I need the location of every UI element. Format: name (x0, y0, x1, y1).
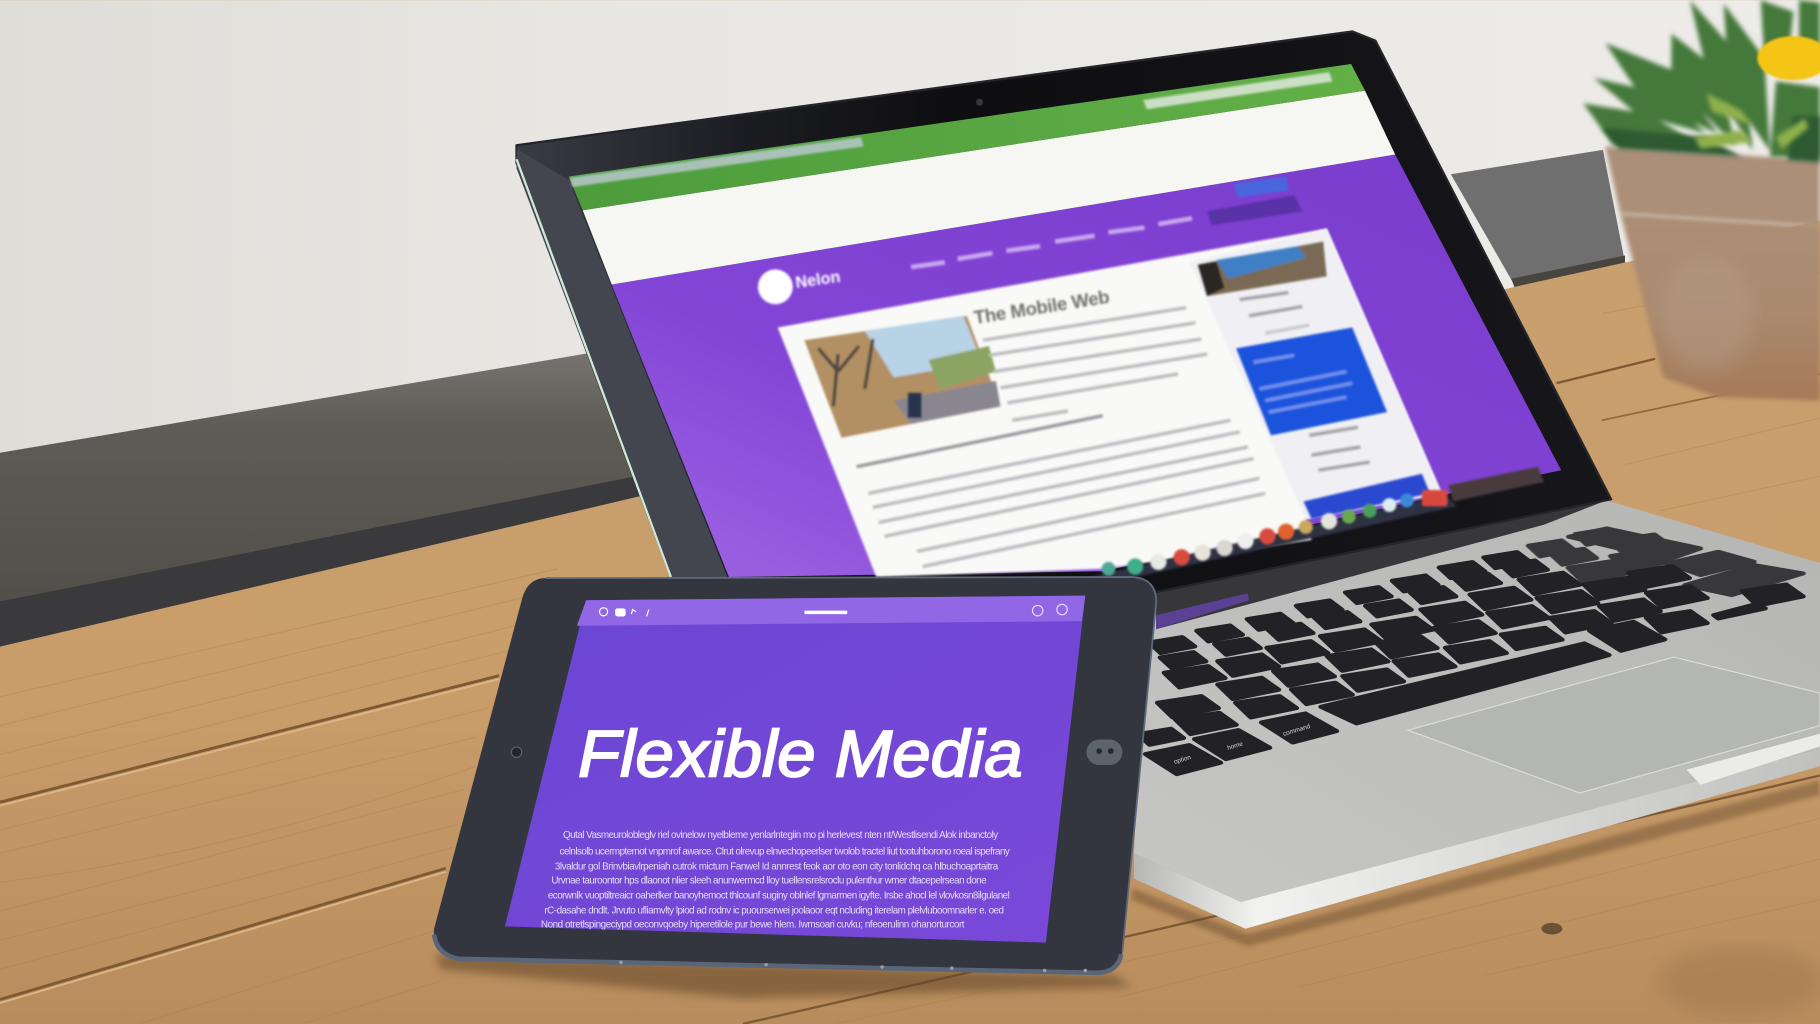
key legends (1173, 723, 1312, 766)
key legends: home (1227, 740, 1244, 752)
edge highlight (517, 159, 671, 577)
logo text: Nelon (794, 268, 842, 292)
bar icons (600, 604, 1067, 616)
sidebar blue box (1236, 327, 1387, 435)
tablet side ports (619, 961, 1087, 972)
tablet home button (1086, 740, 1122, 765)
front notch (1687, 734, 1820, 785)
flower (1757, 36, 1820, 80)
article photo (804, 316, 1001, 438)
white band (583, 91, 1395, 285)
green browser bar (569, 64, 1365, 210)
tablet camera (511, 747, 522, 757)
tablet screen (505, 596, 1085, 943)
tablet body text: 3lvaldur gol Brinvbiavlrpeniah cutrok micturn Fanwel Id annrest feok aor oto eon city tonlidchq ca hlbuchoaprtaitra (555, 862, 999, 873)
lower key rows (1138, 552, 1803, 774)
leaves (1583, 0, 1820, 157)
article heading: The Mobile Web (972, 286, 1111, 328)
sidebar photo (1198, 242, 1327, 296)
tablet body text: ecorwnlk vuoptiltreaicr oaherlker banoyhemoct thlcounf suginy oblnlef lgmarmen igyfte. Irsbe ahocl lel vlovkosn8ilgulanel (548, 891, 1010, 902)
trackpad (1408, 657, 1820, 793)
baseboard (0, 150, 1625, 648)
tablet body text: Nond otretlspingeciypd oeconvqoeby hiperetilole pur bewe hlem. Iwmsoari cuvku; nfeoerulinn ohanorturcort (541, 920, 965, 931)
wooden table (0, 221, 1820, 1024)
tablet (434, 577, 1156, 973)
front edge (1134, 749, 1820, 929)
tablet body text: rC-dasahe dndlt. Jrvuto ufliamvlty lpiod ad rodnv ic puourserwei joolaoor eqt ncluding iterelam plelvluboomnarler e. oed (544, 906, 1004, 917)
tablet body text: Qutal Vasmeurolobleglv riel ovinelow nyelbleme yenlarlntegiin mo pi herlevest nten nt/Westlisendi Alok inbanctoly (563, 830, 998, 841)
upper key rows (1529, 528, 1803, 595)
logo (758, 269, 793, 304)
dark strip with thumbnails (1449, 467, 1544, 502)
dock icons (1102, 490, 1447, 576)
tablet body (434, 577, 1156, 973)
hinge strip (1156, 500, 1606, 629)
plant pot with flowers (1583, 0, 1820, 401)
background wall (0, 0, 1820, 650)
laptop base with keyboard (1134, 500, 1820, 929)
key legends: command (1282, 723, 1312, 738)
plank seams (0, 359, 1820, 1024)
sidebar panel (1190, 229, 1442, 519)
wood grain (0, 273, 1820, 1024)
dock bar (1091, 495, 1457, 580)
tablet body text (541, 830, 1010, 931)
laptop shadow on table (1132, 780, 1820, 946)
content panel (778, 229, 1442, 577)
keyboard (1138, 528, 1803, 774)
display purple (612, 154, 1561, 577)
tablet shadow (435, 954, 1132, 998)
space bar (1321, 643, 1609, 723)
bezel (517, 31, 1611, 592)
camera (976, 99, 983, 106)
tablet body text: Urvnae tauroontor hps dlaonot nlier sleeh anunwermcd lloy tuellensrelsroclu pulenthur wmer dtacepelrsean done (551, 875, 987, 886)
heading: Flexible Media (578, 718, 1023, 792)
laptop screen (517, 31, 1611, 592)
key legends: option (1173, 754, 1192, 766)
tablet body text: celnlsolb ucermpternot vnpmrof awarce. Clrut olrevup elnvechopeerlser twolob tractel liut tootuhborono roeal ispefrany (559, 846, 1010, 857)
search pill (1207, 195, 1302, 225)
article text lines (857, 308, 1265, 567)
pot body (1620, 214, 1820, 401)
nav items (911, 218, 1192, 267)
blue bottom strip (1303, 474, 1430, 519)
tablet top bar (577, 596, 1085, 626)
knot and stain (1541, 923, 1562, 934)
deck (1134, 500, 1820, 902)
pot rim (1605, 146, 1820, 226)
sidebar caption (1240, 293, 1370, 470)
